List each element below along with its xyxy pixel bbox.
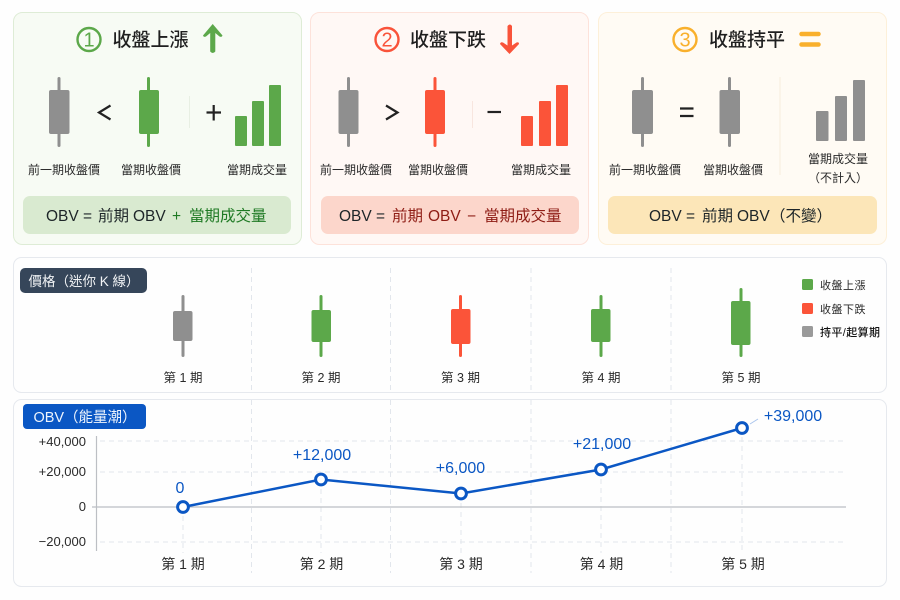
label: period 1: 第 1 期 [164, 370, 202, 385]
line: OBV series [178, 419, 758, 512]
candle: previous close [338, 77, 358, 147]
candle: previous close [632, 77, 653, 147]
label: previous close: 前一期收盤價 [609, 162, 681, 177]
label: volume not counted: （不計入） [808, 170, 868, 185]
label: period 5: 第 5 期 [721, 556, 765, 572]
formula: close up: 當期成交量 [189, 207, 267, 225]
badge: OBV [23, 404, 146, 429]
label: period 3: 第 3 期 [441, 370, 480, 385]
label: period 4: 第 4 期 [580, 556, 623, 572]
value: period 4: +21,000 [573, 436, 631, 453]
formula: close down [321, 196, 579, 234]
label: current close: 當期收盤價 [121, 163, 181, 177]
y axis labels: 0 [79, 499, 86, 514]
candle: current close [425, 77, 445, 147]
axis lines [92, 436, 846, 551]
y axis labels: +20,000 [39, 464, 86, 479]
label: period 3: 第 3 期 [439, 556, 483, 572]
value: period 3: +6,000 [436, 460, 485, 477]
candle: current close [139, 77, 159, 147]
symbol: plus [206, 105, 221, 120]
bars: volume [521, 85, 568, 146]
label: period 5: 第 5 期 [722, 370, 760, 385]
legend: 收盤上漲 [820, 278, 866, 292]
formula: close up: 前期 [98, 207, 129, 225]
label: period 1: 第 1 期 [161, 556, 205, 572]
panel: close down [310, 12, 588, 244]
badge: OBV: OBV（能量潮） [33, 409, 137, 426]
label: volume not counted: 當期成交量 [808, 152, 868, 166]
heading: close down: 收盤下跌 [410, 29, 486, 51]
badge: price: 價格（迷你 K 線） [28, 274, 140, 289]
y axis labels [39, 434, 86, 549]
formula: close flat [608, 196, 877, 234]
formula: close flat: OBV [737, 208, 770, 225]
heading: close flat [674, 28, 785, 52]
formula: close flat: OBV = [649, 208, 695, 225]
label: previous close: 前一期收盤價 [320, 162, 392, 177]
heading: close down [376, 28, 486, 52]
legend: 收盤下跌 [820, 302, 866, 316]
bars: volume not counted [816, 80, 865, 141]
legend [802, 278, 880, 339]
candle: period 3 [451, 295, 470, 357]
symbol: equals [680, 108, 694, 116]
candle: period 1 [173, 295, 192, 357]
label: current close: 當期收盤價 [408, 163, 468, 177]
symbol: less than [99, 106, 110, 120]
candle: period 4 [591, 295, 610, 357]
y axis labels: −20,000 [39, 534, 86, 549]
label: period 2: 第 2 期 [302, 370, 340, 385]
formula: close down: OBV = [339, 208, 385, 225]
heading: close flat: 收盤持平 [709, 29, 785, 51]
y axis labels: +40,000 [39, 434, 86, 449]
panel: close flat [598, 12, 886, 244]
bars: volume [235, 85, 281, 146]
icon: equals [802, 34, 818, 44]
icon: down arrow [500, 24, 519, 54]
formula: close up: + [172, 208, 181, 225]
heading: close up [78, 28, 189, 52]
label: current close: 當期收盤價 [703, 163, 763, 177]
symbol: minus [488, 111, 501, 113]
value: period 1: 0 [176, 480, 185, 497]
panel: close up [14, 12, 302, 244]
value: period 5: +39,000 [764, 408, 822, 425]
formula: close down: OBV [428, 208, 461, 225]
formula: close flat: （不變） [770, 207, 832, 225]
candle: current close [720, 77, 740, 147]
candle: period 5 [731, 288, 750, 357]
label: previous close: 前一期收盤價 [28, 162, 100, 177]
label: period 2: 第 2 期 [300, 556, 343, 572]
icon: up arrow [203, 24, 222, 53]
heading: close up: 1 [83, 30, 95, 52]
heading: close down: 2 [381, 30, 393, 52]
label: volume: 當期成交量 [511, 162, 571, 177]
badge: price [20, 268, 147, 293]
label: period 4: 第 4 期 [582, 370, 620, 385]
formula: close flat: 前期 [702, 207, 733, 225]
label: volume: 當期成交量 [227, 162, 287, 177]
panel: price candles [14, 258, 886, 392]
formula: close down: − [467, 208, 476, 225]
legend: 持平/起算期 [820, 325, 880, 339]
heading: close up: 收盤上漲 [112, 29, 189, 51]
formula: close up: OBV = [46, 208, 92, 225]
formula: close up [23, 196, 291, 234]
formula: close up: OBV [133, 208, 166, 225]
formula: close down: 前期 [392, 207, 423, 225]
candle: previous close [49, 77, 70, 147]
heading: close flat: 3 [679, 30, 691, 52]
formula: close down: 當期成交量 [484, 207, 562, 225]
panel: OBV chart [14, 400, 886, 586]
candle: period 2 [312, 295, 331, 357]
symbol: greater than [386, 106, 398, 120]
value: period 2: +12,000 [293, 447, 351, 464]
